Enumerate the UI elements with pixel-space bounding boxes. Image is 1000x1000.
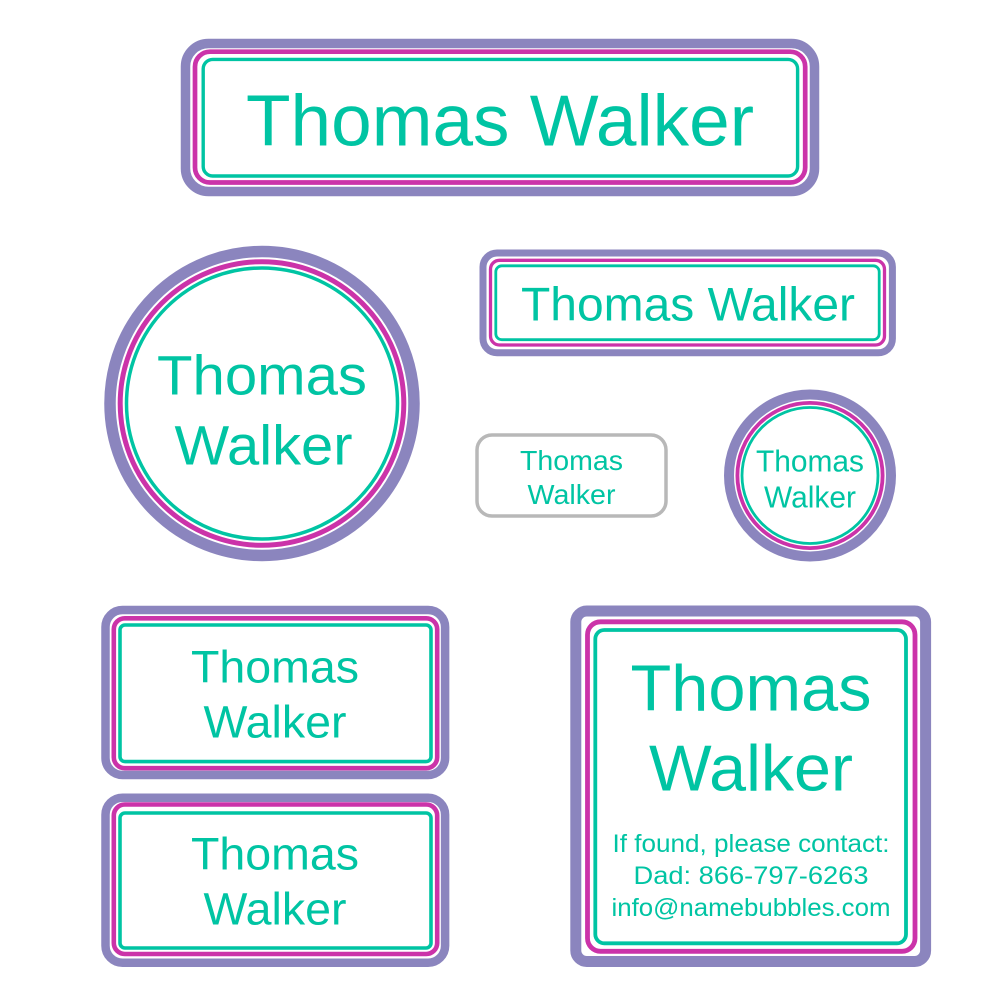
label: small circle: Walker xyxy=(764,480,856,514)
label: small grey outlined: Walker xyxy=(528,479,616,510)
contact details text: info@namebubbles.com xyxy=(612,894,890,922)
label: small grey outlined: Thomas xyxy=(520,445,623,476)
label: large circle xyxy=(110,252,414,556)
label: large circle: Walker xyxy=(174,414,352,476)
label: bottom-left rectangle upper: Thomas xyxy=(191,642,359,692)
label: wide top name label xyxy=(186,44,814,192)
label: bottom-left rectangle lower xyxy=(106,798,445,963)
label: square contact label: Walker xyxy=(649,732,853,804)
label: small circle: Thomas xyxy=(756,444,864,478)
label: square contact label: Thomas xyxy=(630,652,872,724)
contact details text: If found, please contact: xyxy=(612,830,890,858)
label: bottom-left rectangle lower: Thomas xyxy=(191,828,359,880)
label: wide top name label: Thomas Walker xyxy=(246,80,754,162)
contact details text xyxy=(612,830,890,922)
contact details text: Dad: 866-797-6263 xyxy=(634,862,868,890)
label: bottom-left rectangle upper: Walker xyxy=(204,696,347,748)
label: bottom-left rectangle upper xyxy=(106,610,445,775)
label: medium rectangle: Thomas Walker xyxy=(521,278,855,330)
label: square contact label xyxy=(576,611,926,962)
label: medium rectangle xyxy=(483,253,892,353)
label: small circle xyxy=(729,394,891,556)
label: large circle: Thomas xyxy=(157,344,367,406)
label: bottom-left rectangle lower: Walker xyxy=(204,884,347,934)
label: small grey outlined xyxy=(477,435,666,516)
